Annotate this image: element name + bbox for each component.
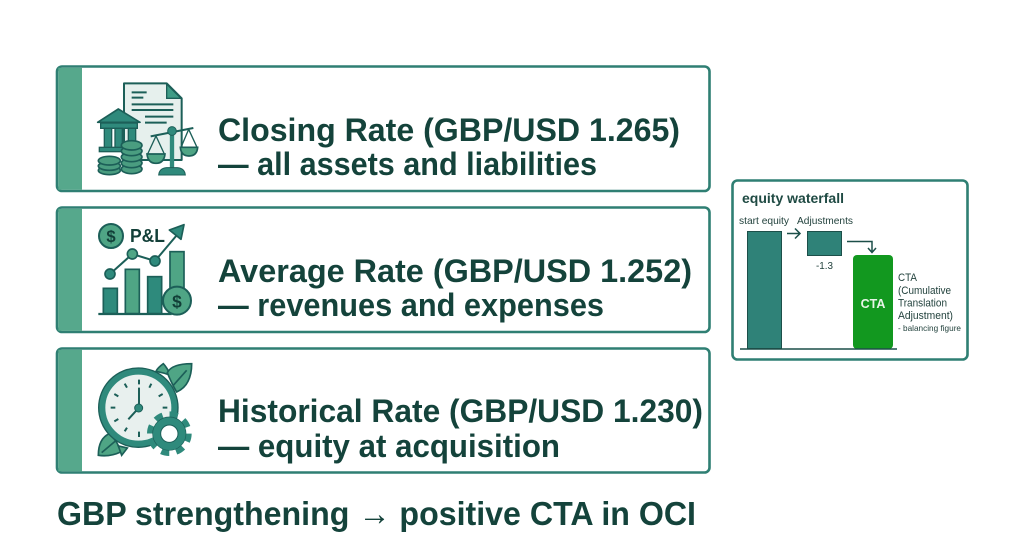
rate heading: Historical Rate (GBP/USD 1.230) bbox=[218, 393, 703, 429]
panel frame bbox=[57, 348, 710, 472]
panel frame bbox=[732, 180, 968, 360]
CTA annotation: CTA bbox=[898, 272, 918, 284]
conclusion statement: GBP strengthening → positive CTA in OCI bbox=[57, 496, 696, 533]
bar: start equity bbox=[748, 232, 782, 348]
accent band bbox=[58, 68, 82, 190]
bar: adjustments bbox=[808, 232, 842, 256]
panel frame bbox=[57, 208, 710, 332]
panel: average rate bbox=[57, 208, 710, 332]
icon: profit and loss chart: $ bbox=[106, 227, 116, 246]
panel title: equity waterfall bbox=[742, 191, 844, 206]
icon: profit and loss chart: P&L bbox=[130, 225, 165, 246]
axis baseline bbox=[740, 348, 897, 350]
bar: CTA bbox=[853, 255, 893, 349]
rate heading: Average Rate (GBP/USD 1.252) bbox=[218, 253, 692, 289]
icon: profit and loss chart: $ bbox=[172, 291, 182, 311]
label: start equity: start equity bbox=[739, 215, 790, 227]
rate heading: Closing Rate (GBP/USD 1.265) bbox=[218, 112, 680, 148]
CTA annotation: Translation bbox=[898, 298, 947, 310]
rate description: — all assets and liabilities bbox=[218, 146, 597, 182]
rate description: — equity at acquisition bbox=[218, 428, 560, 464]
icon: clock, gear and leaves bbox=[98, 364, 192, 456]
value: adjustment: -1.3 bbox=[816, 260, 833, 272]
bar label: CTA: CTA bbox=[861, 297, 885, 311]
panel: historical rate bbox=[57, 348, 710, 472]
label: adjustments: Adjustments bbox=[797, 215, 853, 227]
icon: profit and loss chart bbox=[98, 224, 191, 315]
panel: closing rate bbox=[57, 66, 710, 191]
CTA annotation bbox=[898, 272, 961, 333]
CTA annotation: (Cumulative bbox=[898, 285, 951, 297]
icon: document, bank, coins and scales bbox=[98, 83, 198, 175]
arrow: adjustments to CTA bbox=[847, 242, 876, 252]
panel: equity waterfall bbox=[732, 180, 968, 360]
arrow: start to adjustments bbox=[787, 228, 800, 238]
CTA annotation: - balancing figure bbox=[898, 323, 961, 333]
rate description: — revenues and expenses bbox=[218, 287, 604, 323]
accent band bbox=[58, 350, 82, 471]
CTA annotation: Adjustment) bbox=[898, 310, 953, 322]
panel frame bbox=[57, 66, 710, 191]
accent band bbox=[58, 209, 82, 331]
